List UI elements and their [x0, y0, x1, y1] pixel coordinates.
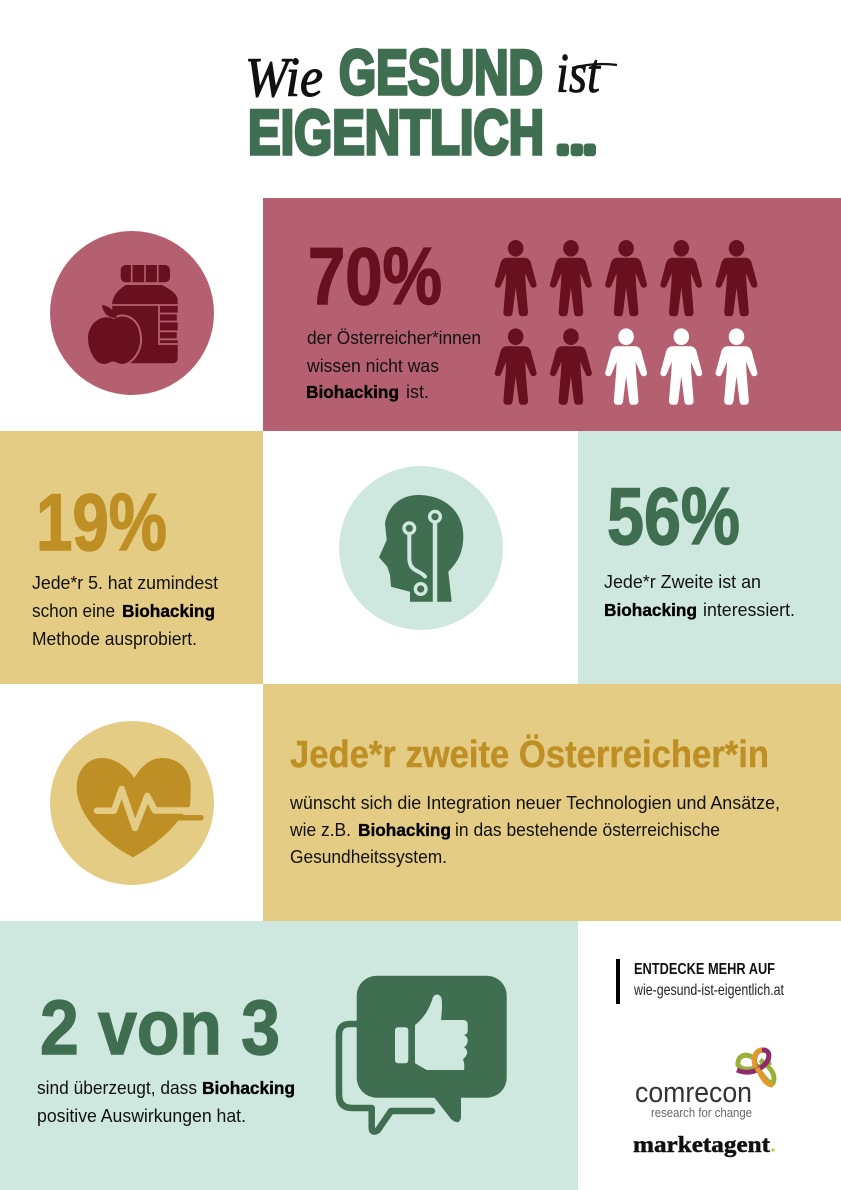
text: 70 percent description: ist.	[406, 382, 429, 402]
call to action: wie-gesund-ist-eigentlich.at	[633, 982, 784, 999]
text: 70 percent description: Biohacking	[306, 382, 399, 402]
text: 2 von 3 description: positive Auswirkungen hat.	[37, 1106, 246, 1126]
logo: comrecon: comrecon	[635, 1077, 752, 1109]
text: 19 percent description: Methode ausprobiert.	[32, 629, 197, 649]
text: 70 percent description	[306, 328, 481, 402]
text: 2 von 3 description: sind überzeugt, dass	[37, 1078, 197, 1098]
title	[245, 38, 617, 168]
text: 56 percent description: interessiert.	[703, 600, 795, 620]
icon: heart with pulse	[50, 721, 214, 885]
stat: 19%: 19%	[36, 478, 167, 568]
heading: Jede*r zweite Österreicher*in: Jede*r zweite Österreicher*in	[290, 733, 769, 776]
text: 19 percent description	[32, 573, 218, 649]
text: 56 percent description: Biohacking	[604, 600, 697, 620]
text: 19 percent description: schon eine	[32, 601, 115, 621]
call to action: ENTDECKE MEHR AUF	[634, 961, 775, 978]
icon: head with circuits	[339, 466, 503, 630]
text: 56 percent description	[604, 572, 795, 620]
panel: integration wish	[263, 684, 841, 921]
logo mark	[737, 1050, 774, 1085]
logo: marketagent: marketagent	[633, 1132, 770, 1157]
text: integration description: wünscht sich die Integration neuer Technologien und Ansätze,	[289, 793, 780, 813]
text: 19 percent description: Biohacking	[122, 601, 215, 621]
text: 70 percent description: der Österreicher*innen	[307, 328, 481, 348]
text: 2 von 3 description: Biohacking	[202, 1078, 295, 1098]
text: 56 percent description: Jede*r Zweite ist an	[604, 572, 761, 592]
stat: 70%: 70%	[308, 232, 442, 322]
panel: 2 von 3	[0, 921, 578, 1190]
stat: 56%: 56%	[607, 472, 740, 562]
pictogram: 7 of 10 people	[495, 240, 757, 405]
icon: thumbs up speech bubbles	[339, 976, 507, 1132]
logo: comrecon	[635, 1050, 774, 1120]
panel: 19 percent	[0, 431, 263, 684]
text: integration description: in das bestehende österreichische	[455, 820, 720, 840]
title: ...	[557, 115, 596, 162]
text: integration description: wie z.B.	[289, 820, 351, 840]
text: integration description: Biohacking	[358, 820, 451, 840]
text: 19 percent description: Jede*r 5. hat zumindest	[32, 573, 218, 593]
panel: 56 percent	[578, 431, 841, 684]
text: integration description	[289, 793, 780, 867]
stat: 2 von 3: 2 von 3	[40, 985, 280, 1071]
text: 70 percent description: wissen nicht was	[306, 356, 439, 376]
title: EIGENTLICH	[248, 98, 544, 168]
panel: 70 percent	[263, 198, 841, 431]
title: Wie	[245, 47, 323, 109]
icon: supplement jar and apple	[50, 231, 214, 395]
title: ist	[556, 43, 601, 105]
logo: comrecon: research for change	[651, 1106, 752, 1120]
title: GESUND	[339, 38, 543, 108]
text: 2 von 3 description	[37, 1078, 295, 1126]
text: integration description: Gesundheitssystem.	[290, 847, 447, 867]
call to action	[616, 959, 784, 1004]
